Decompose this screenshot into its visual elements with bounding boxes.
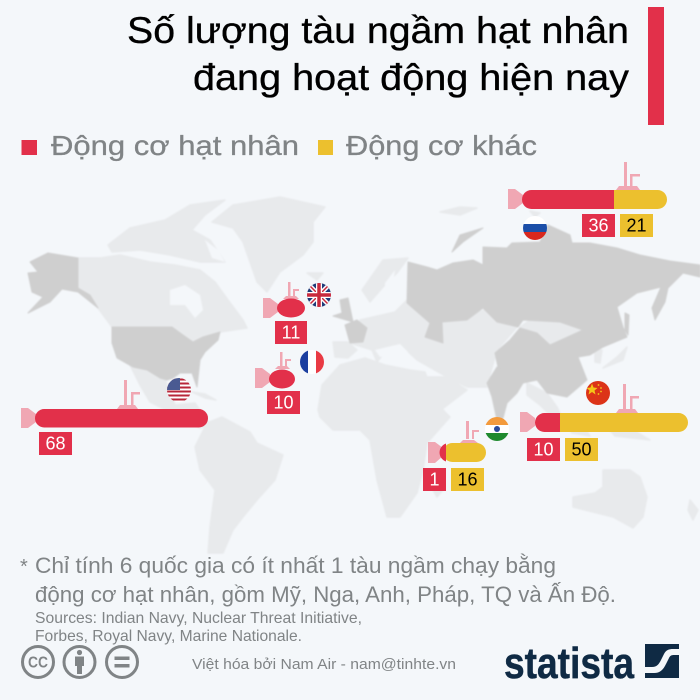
world map bbox=[28, 197, 700, 553]
sources: Sources: Indian Navy, Nuclear Threat Initiative, bbox=[35, 610, 362, 627]
flag: China bbox=[586, 381, 610, 405]
sources bbox=[35, 610, 362, 645]
translator credit: Việt hóa bởi Nam Air - nam@tinhte.vn bbox=[192, 656, 456, 673]
flag: France bbox=[300, 350, 324, 374]
submarine: China: 10 bbox=[533, 440, 554, 460]
title: Số lượng tàu ngầm hạt nhân bbox=[127, 10, 629, 51]
submarine: China bbox=[520, 384, 688, 461]
submarine: Russia: 21 bbox=[626, 216, 647, 236]
icon: creative commons bbox=[22, 646, 138, 678]
flag: India bbox=[485, 417, 509, 441]
submarine: China: 50 bbox=[571, 440, 592, 460]
footnote bbox=[20, 553, 616, 607]
icon: attribution bbox=[64, 646, 95, 678]
title: đang hoạt động hiện nay bbox=[193, 57, 630, 98]
flag: UK bbox=[307, 283, 331, 307]
submarine: USA: 68 bbox=[45, 434, 66, 454]
title bbox=[127, 10, 630, 98]
submarine: France: 10 bbox=[273, 392, 294, 412]
submarine: India bbox=[423, 421, 486, 491]
legend: other: Động cơ khác bbox=[346, 130, 537, 161]
footnote: * bbox=[20, 556, 28, 578]
submarine: Russia bbox=[508, 162, 667, 237]
footnote: Chỉ tính 6 quốc gia có ít nhất 1 tàu ngầm chạy bằng bbox=[35, 553, 556, 578]
submarine: India: 1 bbox=[429, 470, 440, 490]
legend: nuclear: Động cơ hạt nhân bbox=[51, 130, 299, 161]
title accent bar bbox=[648, 7, 664, 125]
sources: Forbes, Royal Navy, Marine Nationale. bbox=[35, 628, 302, 645]
submarine: UK: 11 bbox=[282, 322, 300, 342]
submarine: UK bbox=[263, 282, 307, 344]
statista logo: statista bbox=[504, 639, 634, 688]
flag: USA bbox=[167, 378, 191, 402]
submarine: USA bbox=[21, 380, 208, 455]
icon: cc: CC bbox=[28, 654, 48, 672]
flag: Russia bbox=[523, 216, 547, 240]
legend bbox=[22, 130, 537, 161]
submarine: Russia: 36 bbox=[588, 216, 609, 236]
submarine: India: 16 bbox=[457, 470, 478, 490]
submarine: France bbox=[255, 352, 300, 414]
icon: no derivatives bbox=[106, 646, 138, 678]
footnote: động cơ hạt nhân, gồm Mỹ, Nga, Anh, Pháp, TQ và Ấn Độ. bbox=[35, 582, 616, 607]
